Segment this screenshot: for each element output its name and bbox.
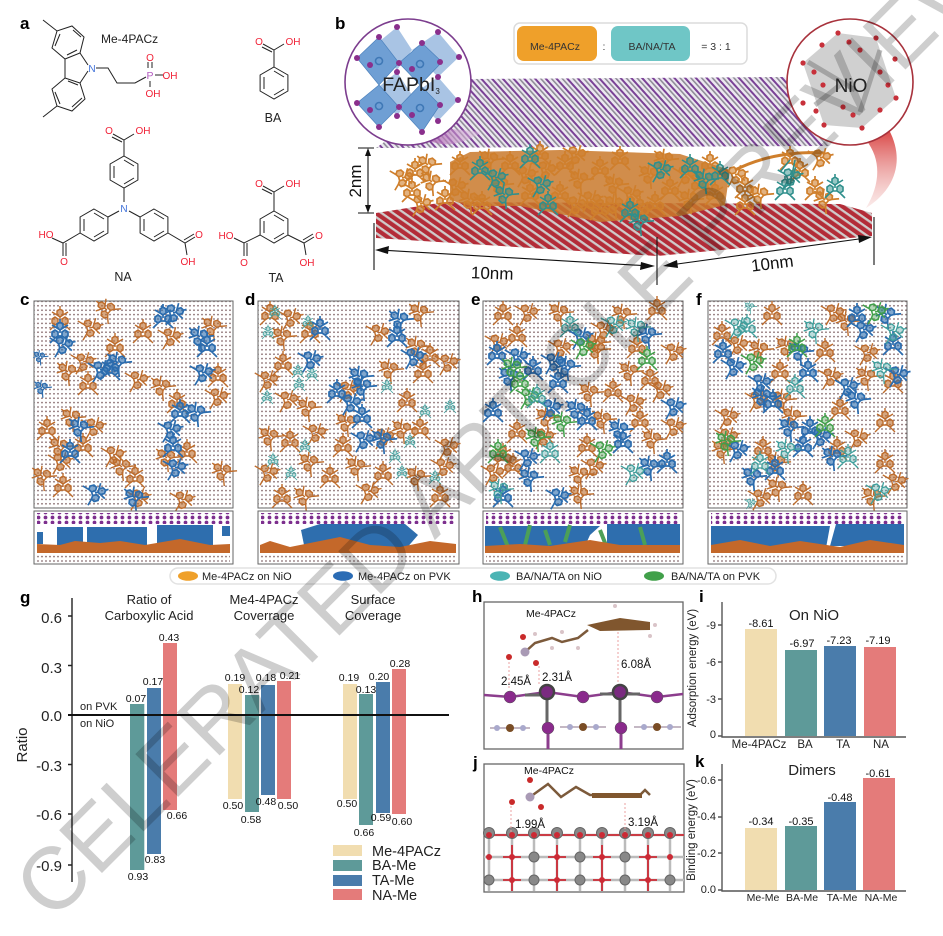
bars: surface coverage: 0.20 (369, 671, 389, 683)
bars: Me-4PACz coverage (223, 670, 300, 826)
axes k: Me-Me (747, 892, 779, 904)
bars i: -7.19 (865, 635, 891, 647)
molecule: BA: OH (286, 37, 300, 48)
column titles (105, 592, 401, 623)
ratio legend: BA/NA/TA (628, 41, 676, 53)
series legend: Me-4PACz (372, 844, 441, 860)
series legend: NA-Me (372, 888, 417, 904)
side view e (483, 511, 683, 564)
bars: surface coverage: 0.19 (339, 672, 359, 684)
bars: ratio of carboxylic acid: 0.83 (145, 854, 165, 866)
molecule: Me-4PACz (43, 20, 178, 117)
zero line with side labels: on NiO (80, 718, 115, 730)
structure h: Me-4PACz (526, 608, 576, 620)
width dimensions: 10nm: 10nm (471, 263, 514, 284)
bars: Me-4PACz coverage: 0.48 (256, 796, 276, 808)
molecule: TA: TA (268, 271, 284, 285)
axes k: -0.2 (697, 848, 716, 860)
panel d: top and side views (245, 290, 463, 564)
panel h: adsorption on perovskite (472, 587, 683, 749)
structure j: 1.99Å (515, 818, 545, 831)
panel label c: c (20, 290, 29, 309)
column titles: Coverage (345, 608, 401, 623)
bars: ratio of carboxylic acid: 0.17 (143, 676, 163, 688)
bars: surface coverage: 0.66 (354, 827, 374, 839)
structure h: 2.45Å (501, 675, 531, 688)
legend: molecule locations: Me-4PACz on PVK (358, 571, 451, 583)
bars k: -0.48 (827, 792, 853, 804)
bars: ratio of carboxylic acid: 0.07 (126, 693, 146, 705)
molecule: TA (218, 179, 323, 285)
pointer from FAPbI3 inset (422, 128, 482, 144)
side view f (708, 511, 907, 564)
molecule: NA: O (105, 126, 113, 137)
zero line with side labels: on PVK (80, 701, 118, 713)
bars: surface coverage (337, 658, 412, 839)
panel c: top and side views (20, 290, 237, 564)
structure j: Me-4PACz (524, 765, 574, 777)
column titles: Surface (351, 592, 395, 607)
molecule: Me-4PACz: OH (146, 89, 160, 100)
top view e (481, 296, 689, 509)
column titles: Carboxylic Acid (105, 608, 193, 623)
axes k: 0.0 (701, 884, 716, 896)
molecule: NA: O (60, 257, 68, 268)
molecule: NA: HO (38, 230, 54, 241)
molecule: NA: OH (136, 126, 150, 137)
thickness dimension: 2nm: 2nm (346, 164, 365, 198)
molecule: TA: OH (300, 258, 314, 269)
axes i: -6 (706, 657, 716, 669)
pointer from NiO inset (866, 128, 897, 208)
NiO slab (376, 202, 872, 256)
bars: ratio of carboxylic acid: 0.66 (167, 810, 187, 822)
molecule: Me-4PACz: P (146, 70, 154, 82)
column titles: Coverrage (234, 608, 294, 623)
panel label k: k (695, 752, 705, 771)
bars: surface coverage: 0.60 (392, 816, 412, 828)
bars: Me-4PACz coverage: 0.50 (278, 800, 298, 812)
inset: NiO crystal (787, 19, 913, 145)
y axis with ticks (14, 598, 72, 882)
bars i: -7.23 (826, 635, 852, 647)
y axis with ticks: 0.0 (41, 708, 62, 725)
bars: Me-4PACz coverage: 0.19 (225, 672, 245, 684)
panel a: chemical structures (20, 14, 323, 285)
molecule: BA: BA (265, 111, 282, 125)
y axis with ticks: -0.3 (36, 758, 62, 775)
inset: FAPbI3 crystal: 3 (435, 87, 440, 96)
molecule: TA: HO (218, 231, 234, 242)
axes k: BA-Me (786, 892, 818, 904)
molecule: Me-4PACz: O (146, 53, 154, 64)
bars i (745, 618, 896, 736)
inset: FAPbI3 crystal (345, 19, 471, 145)
bars: Me-4PACz coverage: 0.50 (223, 800, 243, 812)
structure h (484, 602, 683, 749)
panel j: adsorption on NiO (472, 753, 684, 892)
top view c (26, 293, 237, 512)
bars: ratio of carboxylic acid: 0.93 (128, 871, 148, 883)
width dimensions: 10nm: 10nm (750, 252, 795, 276)
y axis with ticks: -0.6 (36, 807, 62, 824)
zero line with side labels (68, 701, 449, 730)
title k: Dimers (788, 762, 836, 779)
side view c (34, 511, 233, 564)
axes i: Me-4PACz (732, 739, 787, 751)
axes i: Adsorption energy (eV) (687, 609, 699, 727)
panel label g: g (20, 588, 30, 607)
axes i: TA (836, 739, 850, 751)
bars i: -6.97 (789, 638, 815, 650)
bars: Me-4PACz coverage: 0.58 (241, 814, 261, 826)
axes i: 0 (710, 729, 716, 741)
panel e: top and side views (471, 290, 689, 564)
molecule: NA: N (120, 204, 128, 215)
y axis with ticks: 0.3 (41, 660, 62, 677)
structure h: 2.31Å (542, 671, 572, 684)
panel k: binding energy chart (686, 752, 906, 904)
axes k: -0.6 (697, 775, 716, 787)
bars: Me-4PACz coverage: 0.12 (239, 684, 259, 696)
panel f: top and side views (696, 290, 913, 564)
panel label a: a (20, 14, 30, 33)
top view f (706, 298, 913, 511)
bars: surface coverage: 0.13 (356, 684, 376, 696)
inset: FAPbI3 crystal: FAPbI (382, 74, 435, 96)
bars i: -8.61 (748, 618, 774, 630)
series legend: BA-Me (372, 858, 416, 874)
bars k: -0.35 (788, 816, 814, 828)
panel b: interface model (335, 14, 913, 285)
bars k (745, 768, 895, 890)
molecule: NA: OH (180, 257, 196, 268)
panel g: ratio bar chart (14, 588, 449, 904)
width dimensions: 10nm (374, 217, 874, 285)
column titles: Ratio of (127, 592, 172, 607)
series legend: TA-Me (372, 873, 414, 889)
legend: molecule locations: BA/NA/TA on PVK (671, 571, 761, 583)
panel label j: j (472, 753, 478, 772)
panel label i: i (699, 587, 704, 606)
y axis with ticks: -0.9 (36, 858, 62, 875)
bars k: -0.61 (865, 768, 891, 780)
molecule: TA: O (240, 258, 248, 269)
molecules between layers (390, 141, 845, 236)
molecule: BA (255, 37, 300, 125)
axes i: NA (873, 739, 889, 751)
molecule: TA: O (315, 231, 323, 242)
molecule: Me-4PACz: OH (162, 71, 178, 82)
bars: surface coverage: 0.28 (390, 658, 410, 670)
inset: NiO crystal: NiO (835, 76, 867, 97)
structure j: 3.19Å (628, 816, 658, 829)
legend: molecule locations: Me-4PACz on NiO (202, 571, 292, 583)
panel label f: f (696, 290, 702, 309)
molecule: NA: O (195, 230, 203, 241)
panel label e: e (471, 290, 480, 309)
molecule: NA (38, 126, 203, 284)
perovskite slab (376, 77, 830, 148)
ratio legend: : (603, 41, 605, 53)
bars k: -0.34 (748, 816, 774, 828)
panel label d: d (245, 290, 255, 309)
column titles: Me4-4PACz (229, 592, 299, 607)
axes k: TA-Me (827, 892, 858, 904)
panel label b: b (335, 14, 345, 33)
panel label h: h (472, 587, 482, 606)
bars: Me-4PACz coverage: 0.21 (280, 670, 300, 682)
structure j (484, 764, 684, 892)
thickness dimension: 2nm (346, 148, 374, 213)
bars: Me-4PACz coverage: 0.18 (256, 672, 276, 684)
molecule: NA: NA (114, 270, 132, 284)
axes k: NA-Me (865, 892, 897, 904)
axes i: -9 (706, 620, 716, 632)
legend: molecule locations: BA/NA/TA on NiO (516, 571, 602, 583)
legend: molecule locations (170, 568, 776, 584)
molecule: BA: O (255, 37, 263, 48)
top view d (253, 296, 463, 511)
ratio legend: Me-4PACz (530, 41, 580, 53)
y axis with ticks: Ratio (14, 727, 31, 763)
panel i: adsorption energy chart (687, 587, 906, 751)
title i: On NiO (789, 607, 839, 624)
bars: surface coverage: 0.50 (337, 798, 357, 810)
y axis with ticks: 0.6 (41, 610, 62, 627)
axes k: Binding energy (eV) (686, 779, 698, 881)
side view d (258, 511, 459, 564)
axes k (686, 764, 906, 904)
axes i (687, 602, 906, 751)
molecule: Me-4PACz: N (88, 64, 96, 75)
bars: surface coverage: 0.59 (371, 812, 391, 824)
axes k: -0.4 (697, 811, 716, 823)
molecule: Me-4PACz: Me-4PACz (101, 32, 158, 46)
axes i: BA (797, 739, 813, 751)
molecule: TA: O (255, 179, 263, 190)
structure h: 6.08Å (621, 658, 651, 671)
bars: ratio of carboxylic acid (126, 632, 187, 883)
ratio legend: = 3 : 1 (701, 41, 731, 53)
molecule: TA: OH (286, 179, 300, 190)
axes i: -3 (706, 694, 716, 706)
series legend (333, 844, 441, 904)
bars: ratio of carboxylic acid: 0.43 (159, 632, 179, 644)
ratio legend (514, 23, 747, 64)
